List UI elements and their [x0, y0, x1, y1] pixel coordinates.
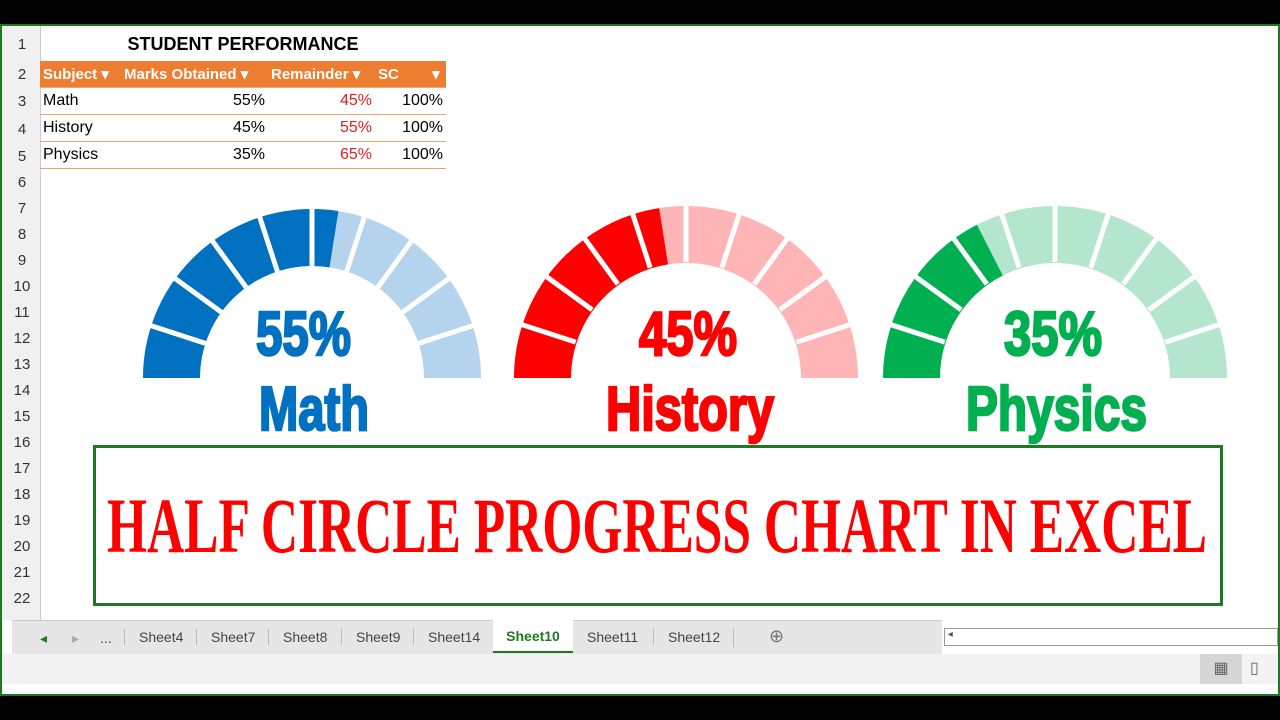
row header column: 13 [14, 356, 30, 373]
row header column: 11 [14, 304, 30, 321]
row header column: 6 [18, 174, 26, 191]
row header column: 2 [18, 66, 26, 83]
row header column: 16 [14, 434, 30, 451]
sheet tabs bar: ◂ [40, 630, 47, 646]
row header column [2, 26, 41, 620]
gauge: history [500, 182, 872, 444]
row header column: 22 [14, 590, 30, 607]
sheet tabs bar: Sheet9 [356, 629, 400, 645]
data table [40, 61, 446, 169]
row header column: 10 [14, 278, 30, 295]
row header column: 19 [14, 512, 30, 529]
sheet tabs bar: Sheet12 [668, 629, 720, 645]
gauge: physics: Physics [966, 375, 1147, 444]
sheet tabs bar: ▸ [72, 630, 79, 646]
gauge: history: 45% [639, 300, 737, 369]
sheet tabs bar: Sheet4 [139, 629, 183, 645]
status bar: ▯ [1250, 660, 1259, 677]
row header column: 12 [14, 330, 30, 347]
data table: 35% [233, 146, 265, 163]
title box [94, 446, 1222, 604]
row header column: 21 [14, 564, 30, 581]
sheet tabs bar: ⊕ [769, 626, 784, 646]
sheet tabs bar: Sheet14 [428, 629, 480, 645]
scrollbar [942, 620, 1278, 654]
data table: 100% [402, 92, 443, 109]
row header column: 14 [14, 382, 30, 399]
row header column: 17 [14, 460, 30, 477]
data table: Subject ▾ [43, 66, 109, 83]
status bar [2, 654, 1278, 684]
data table: History [43, 119, 93, 136]
data table: 45% [233, 119, 265, 136]
status bar: ▦ [1213, 660, 1229, 677]
row header column: 20 [14, 538, 30, 555]
sheet tabs bar: Sheet8 [283, 629, 327, 645]
gauge: math: 55% [256, 300, 351, 369]
data table: 65% [340, 146, 372, 163]
data table: Marks Obtained ▾ [124, 66, 248, 83]
sheet tabs bar: Sheet7 [211, 629, 255, 645]
scrollbar: ◂ [948, 629, 953, 640]
row header column: 3 [18, 93, 26, 110]
gauge: physics [869, 182, 1241, 444]
row header column: 9 [18, 252, 26, 269]
sheet tabs bar: Sheet11 [587, 629, 638, 645]
row header column: 8 [18, 226, 26, 243]
data table: Physics [43, 146, 98, 163]
gauge: physics: 35% [1004, 300, 1102, 369]
data table: 55% [340, 119, 372, 136]
gauge: math [129, 186, 495, 444]
data table: Math [43, 92, 79, 109]
row header column: 15 [14, 408, 30, 425]
row header column: 1 [18, 36, 26, 53]
sheet tabs bar: ... [100, 630, 112, 646]
sheet tabs bar [12, 620, 942, 655]
row header column: 7 [18, 200, 26, 217]
gauge: math: Math [259, 375, 369, 444]
data table: 45% [340, 92, 372, 109]
data table: 55% [233, 92, 265, 109]
row header column: 5 [18, 148, 26, 165]
row header column: 18 [14, 486, 30, 503]
gauge: history: History [606, 375, 774, 444]
table title: STUDENT PERFORMANCE [127, 34, 358, 54]
data table: 100% [402, 146, 443, 163]
data table: 100% [402, 119, 443, 136]
data table: SC ▾ [378, 66, 440, 83]
sheet tabs bar: Sheet10 [506, 628, 560, 644]
data table: Remainder ▾ [271, 66, 360, 83]
row header column: 4 [18, 121, 26, 138]
